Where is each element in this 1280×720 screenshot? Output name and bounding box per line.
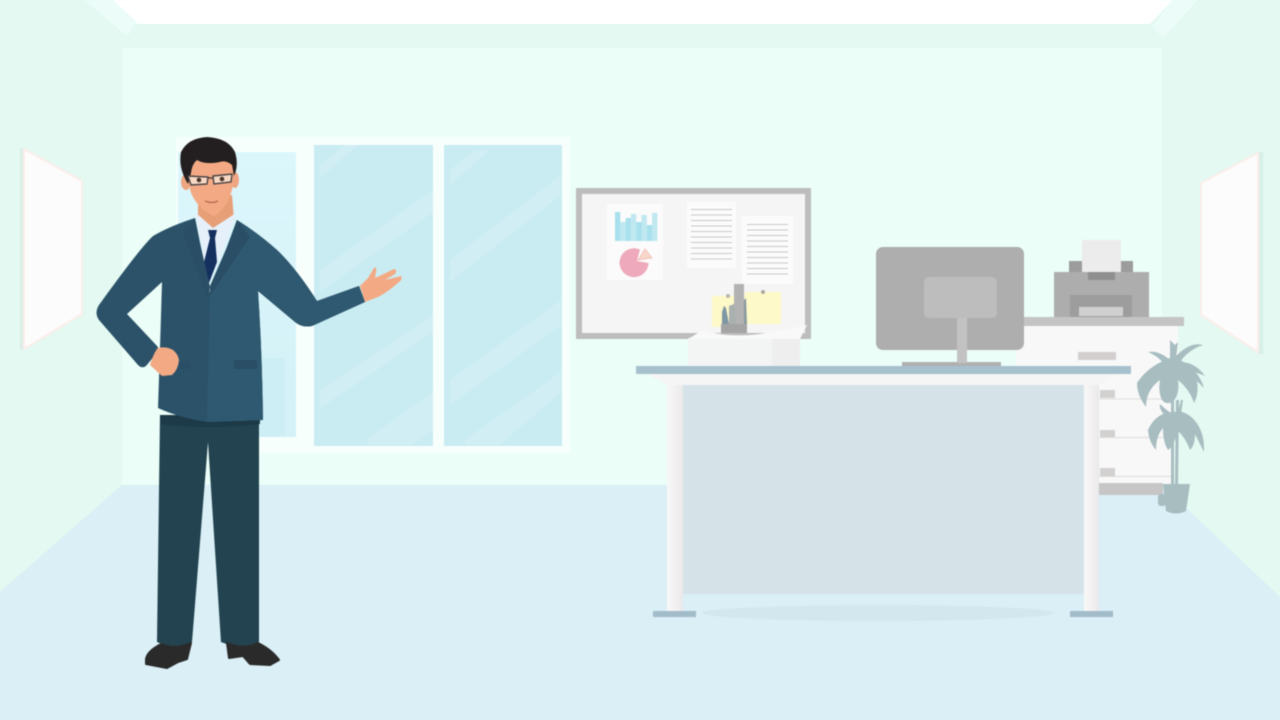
sticky notes [712, 290, 781, 327]
printer [1054, 240, 1149, 317]
mouth [205, 201, 218, 202]
glasses [188, 174, 232, 185]
document: charts [607, 204, 663, 280]
filing cabinet [1016, 317, 1184, 495]
desk [636, 366, 1131, 621]
hair [180, 137, 237, 184]
document: text left [687, 202, 736, 268]
document: text right [742, 216, 793, 284]
shoes [146, 643, 279, 668]
monitor [876, 247, 1024, 367]
notice board [576, 188, 811, 339]
trousers [157, 415, 260, 646]
paper stack [688, 325, 807, 366]
head [180, 137, 239, 216]
neck [198, 195, 234, 232]
businessman [96, 137, 402, 668]
hand: open [360, 268, 402, 302]
plant [1137, 340, 1205, 514]
wall frame: left [20, 148, 82, 350]
tie [204, 230, 217, 283]
shirt [195, 212, 236, 283]
jacket [96, 218, 365, 422]
hand: fist [150, 347, 179, 376]
wall frame: right [1201, 152, 1263, 354]
window [176, 137, 570, 453]
pen holder [721, 284, 747, 333]
lapels [183, 218, 210, 300]
pockets [234, 360, 257, 369]
